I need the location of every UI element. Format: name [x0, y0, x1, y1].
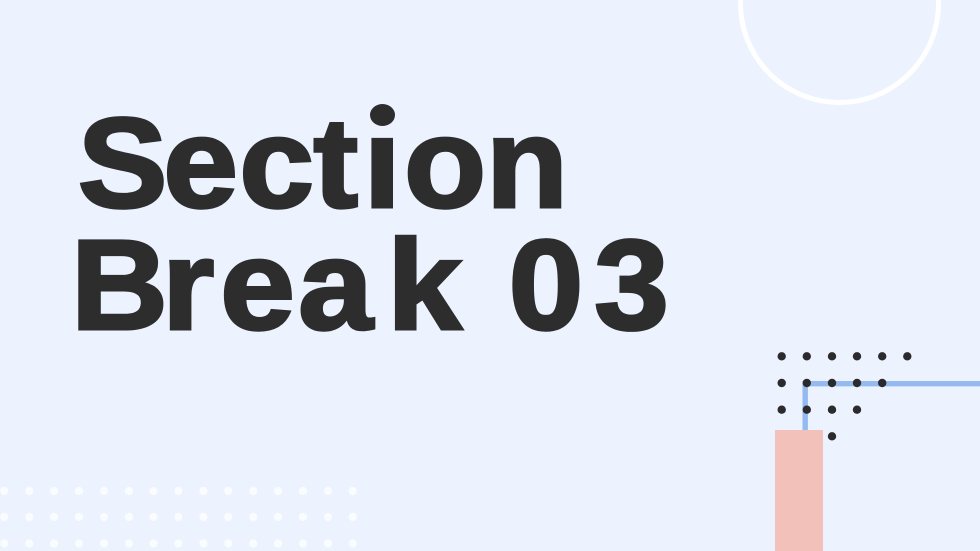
- title: [71, 91, 669, 356]
- decorative white circle outline: [740, 0, 938, 102]
- white dot grid, bottom left: [0, 487, 357, 548]
- title: Break 03: [71, 213, 669, 356]
- title: Section: [78, 91, 568, 234]
- blue corner line: [805, 384, 980, 431]
- pink rectangle: [775, 430, 823, 551]
- dark dot grid: [778, 352, 912, 440]
